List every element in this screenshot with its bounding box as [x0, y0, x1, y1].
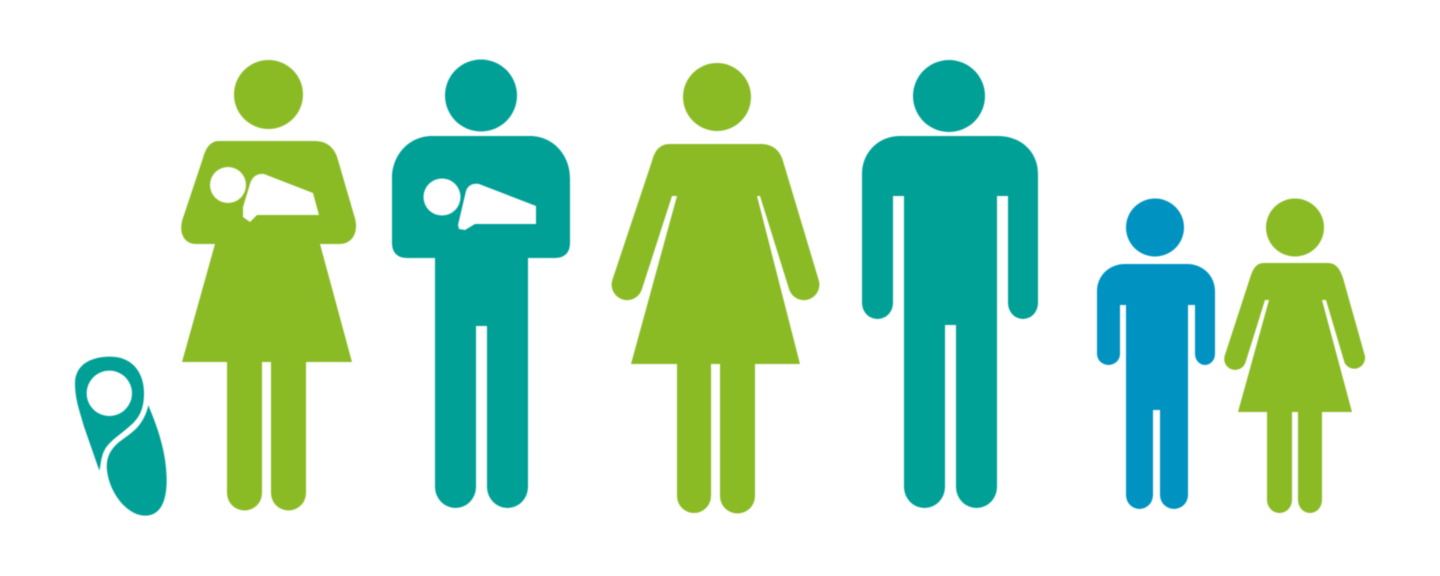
- icon: father holding baby: [392, 60, 570, 508]
- icon: man: [862, 60, 1038, 508]
- boy head: [1126, 198, 1184, 256]
- carried baby, mother: [210, 167, 319, 222]
- father body: [392, 136, 570, 508]
- icon: girl: [1224, 198, 1365, 513]
- girl body: [1224, 263, 1365, 513]
- man head: [913, 60, 985, 132]
- carried baby, father: [424, 178, 536, 230]
- icon: boy: [1097, 198, 1215, 509]
- icon: swaddled baby: [75, 357, 167, 516]
- girl head: [1266, 198, 1324, 256]
- woman head: [683, 63, 751, 131]
- woman body: [612, 144, 819, 514]
- man body: [862, 136, 1038, 508]
- boy body: [1097, 264, 1215, 509]
- mother body: [181, 141, 356, 510]
- father head: [445, 60, 517, 132]
- mother head: [234, 60, 303, 129]
- icon: woman: [612, 63, 819, 514]
- icon: mother holding baby: [181, 60, 356, 510]
